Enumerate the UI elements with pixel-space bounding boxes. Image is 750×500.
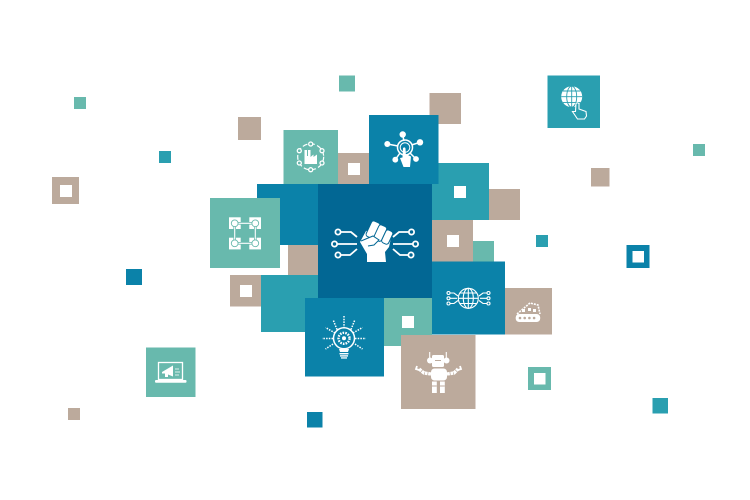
square: teal-blue right: [536, 235, 548, 247]
panel: conveyor tile: [505, 288, 552, 334]
panel: lightbulb tile: [305, 298, 384, 376]
icon: globe with circuit lines: [447, 288, 490, 308]
hollow square: tan center right: [432, 220, 473, 262]
square: tan top right: [430, 93, 461, 124]
square: blue left: [126, 269, 142, 285]
square: blue bottom: [307, 412, 322, 428]
panel: globe touch tile: [548, 76, 600, 128]
square: tan under blue tile: [288, 245, 318, 275]
square: teal top: [339, 76, 355, 92]
square: tan bottom left: [68, 408, 80, 420]
hollow square: tan left: [52, 177, 79, 204]
panel: network touch tile: [369, 115, 438, 184]
icon: conveyor belt with robot arm: [516, 303, 540, 322]
square: teal beside tan tile: [473, 241, 494, 262]
hollow tile: teal lower center: [384, 298, 432, 346]
hollow square: tan top center: [338, 153, 369, 184]
hollow tile: teal-blue upper right: [432, 163, 489, 220]
icon: bounding box corners: [229, 217, 261, 249]
tile: plain blue: [257, 184, 318, 245]
panel: robot tile: [401, 335, 476, 409]
square: teal-blue bottom right: [652, 398, 668, 414]
square: teal left: [74, 97, 86, 109]
icon: globe with pointing hand: [561, 86, 586, 119]
icon: factory in node ring: [297, 142, 324, 172]
square: tan right: [591, 168, 610, 186]
icon: lightbulb with gear: [322, 316, 366, 359]
circuit lines left: [332, 229, 357, 258]
scattered small squares: [68, 76, 705, 428]
fist: [360, 220, 394, 262]
square: teal-blue left: [159, 151, 171, 163]
panel: factory tile: [284, 130, 338, 184]
square: teal far right: [693, 144, 705, 156]
panel: central fist tile: [318, 184, 432, 298]
tile: plain teal-blue: [261, 275, 318, 332]
panel: connected globe tile: [432, 262, 505, 334]
icon: hand touching network hub: [384, 131, 423, 167]
icon: fist with circuit lines: [332, 220, 418, 262]
hollow square: teal bottom right: [528, 367, 551, 390]
circuit lines right: [393, 229, 418, 258]
panel: corners selection tile: [210, 198, 280, 268]
square: tan beside teal tile: [489, 189, 520, 220]
square: tan upper: [238, 117, 261, 140]
hollow square: tan lower left: [230, 275, 261, 306]
icon: laptop with megaphone: [155, 362, 186, 383]
icon: robot: [416, 352, 461, 393]
hollow square: blue right: [626, 245, 650, 268]
panel: laptop megaphone tile: [146, 348, 196, 397]
